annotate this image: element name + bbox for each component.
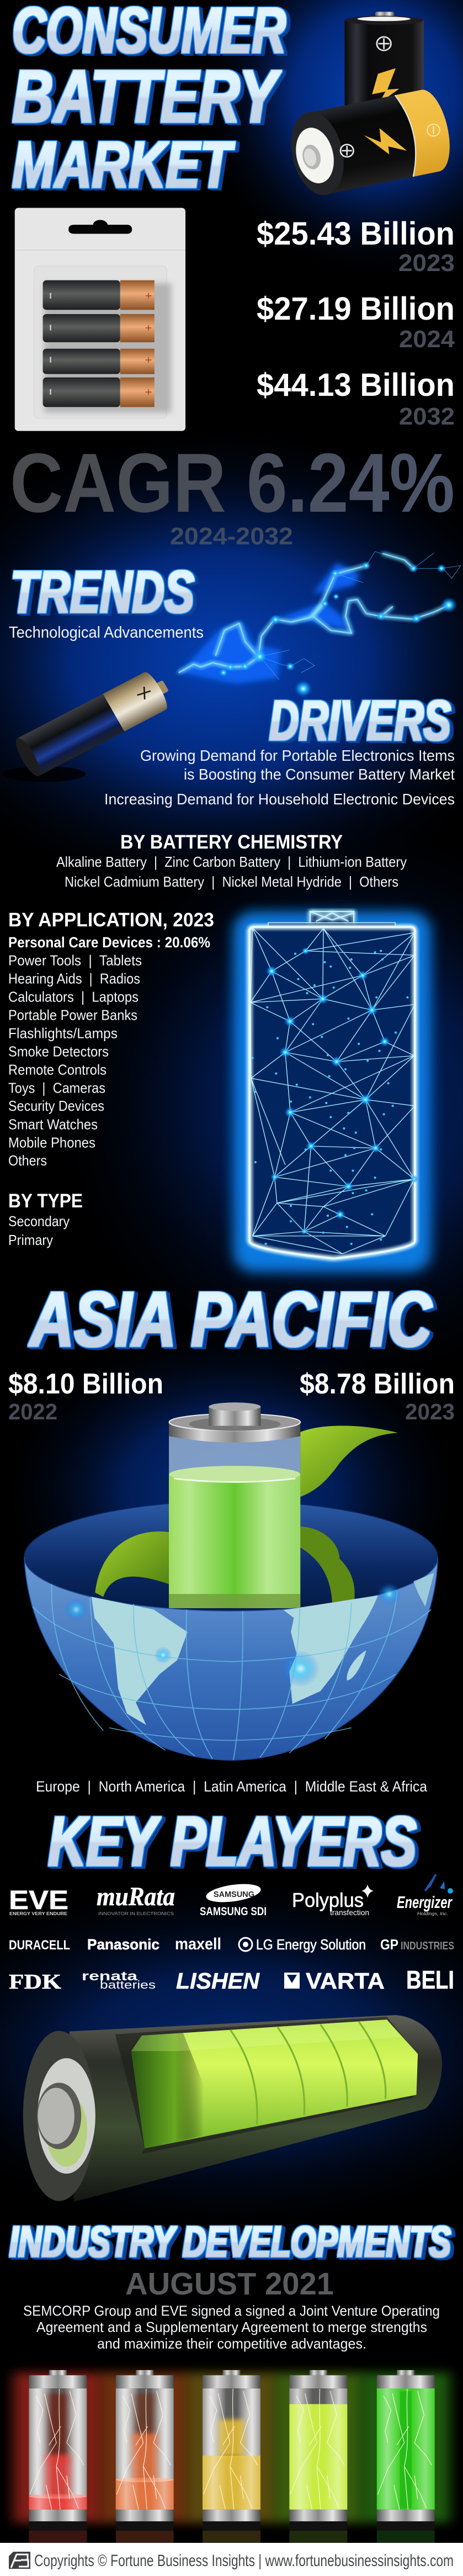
market value stats: 2024 [399, 326, 455, 353]
logo: Samsung SDI: SAMSUNG [214, 1890, 254, 1899]
logo: Polyplus: Polyplus [292, 1889, 364, 1911]
icon: globe bowl with battery and leaves [24, 1402, 438, 1760]
icon: blister pack of AA batteries [15, 208, 185, 431]
logo: Renata [82, 1969, 156, 1991]
logo: Energizer: Holdings, Inc. [417, 1911, 448, 1916]
icon: Fortune Business Insights logo [9, 2552, 30, 2569]
market value stats: $44.13 Billion [257, 367, 455, 403]
by application: Calculators | Laptops [8, 988, 139, 1005]
battery: red [14, 2370, 102, 2543]
asia pacific stats: 2022 [8, 1399, 57, 1424]
development text: SEMCORP Group and EVE signed a signed a Joint Venture Operating [23, 2302, 440, 2319]
by type: Secondary [8, 1213, 70, 1229]
by application: Hearing Aids | Radios [8, 971, 140, 987]
development text: and maximize their competitive advantages. [97, 2335, 366, 2352]
logo: muRata: INNOVATOR IN ELECTRONICS [98, 1911, 174, 1916]
icon: lightning [179, 552, 461, 697]
battery: yellow [187, 2370, 276, 2543]
by application: Smoke Detectors [8, 1043, 109, 1059]
market value stats: 2032 [399, 403, 455, 430]
battery: green [361, 2370, 450, 2543]
logo: Polyplus: transfection [330, 1908, 369, 1917]
by application: Personal Care Devices : 20.06% [8, 934, 210, 951]
by application: Portable Power Banks [8, 1006, 137, 1023]
by application: BY APPLICATION, 2023 [8, 909, 214, 931]
by application: Mobile Phones [8, 1135, 95, 1151]
logo: Lishen: LISHEN [176, 1968, 260, 1994]
logo: FDK: FDK [9, 1970, 62, 1994]
logo: GP Industries: GP [380, 1936, 398, 1953]
development text [23, 2266, 440, 2352]
icon: AA battery [3, 667, 177, 782]
logo: Renata: renata [82, 1969, 137, 1983]
logo: muRata: muRata [97, 1882, 175, 1911]
logo: EVE: EVE [9, 1886, 68, 1915]
company logos [9, 1874, 454, 1994]
by battery chemistry: Alkaline Battery | Zinc Carbon Battery | Lithium-ion Battery [56, 854, 407, 870]
logo: Energizer [397, 1874, 453, 1916]
by application: Security Devices [8, 1098, 104, 1114]
logo: Beli: BELI [406, 1965, 454, 1994]
asia pacific stats: 2023 [405, 1399, 455, 1424]
logo: Duracell: DURACELL [9, 1938, 70, 1953]
drivers heading and text: Growing Demand for Portable Electronics Items [140, 747, 455, 764]
asia pacific stats [8, 1368, 455, 1424]
market value stats [257, 216, 455, 430]
development text: Agreement and a Supplementary Agreement to merge strengths [36, 2319, 427, 2335]
logo: LG Energy Solution: LG Energy Solution [256, 1936, 366, 1953]
by application: Others [8, 1152, 47, 1169]
by battery chemistry: BY BATTERY CHEMISTRY [120, 831, 343, 853]
continents [92, 1573, 434, 1725]
regions: Europe | North America | Latin America | Middle East & Africa [36, 1778, 428, 1795]
drivers heading and text: is Boosting the Consumer Battery Market [184, 766, 455, 783]
by application: Power Tools | Tablets [8, 952, 142, 968]
green battery [169, 1402, 300, 1608]
logo: EVE: ENERGY VERY ENDURE [9, 1911, 68, 1916]
battery: orange [100, 2370, 189, 2543]
logo: Panasonic: Panasonic [87, 1936, 159, 1953]
drivers heading and text: Increasing Demand for Household Electronic Devices [104, 791, 455, 808]
logo: Renata: batteries [100, 1979, 156, 1991]
logo: Samsung SDI: SAMSUNG SDI [200, 1905, 267, 1918]
bowl interior [24, 1501, 438, 1614]
market value stats: 2023 [398, 250, 455, 277]
drivers heading and text [104, 689, 455, 808]
icon: large green battery [23, 2015, 442, 2202]
trends heading and text: Technological Advancements [9, 624, 204, 642]
bowl front [24, 1557, 438, 1760]
by type: Primary [8, 1232, 53, 1248]
logo: Maxell: maxell [175, 1935, 221, 1953]
logo: Varta: VARTA [306, 1968, 385, 1994]
title: BATTERY [12, 55, 281, 138]
by battery chemistry: Nickel Cadmium Battery | Nickel Metal Hydride | Others [65, 873, 398, 890]
footer [0, 2543, 463, 2576]
by application: Flashlights/Lamps [8, 1025, 118, 1042]
title [12, 0, 286, 202]
leaves [95, 1425, 398, 1603]
by battery chemistry [56, 831, 407, 890]
logo: Samsung SDI [200, 1881, 267, 1918]
icon: glowing network battery [233, 911, 431, 1272]
grid lines [33, 1584, 431, 1760]
market value stats: $27.19 Billion [257, 291, 455, 327]
icons: five charge level batteries [14, 2370, 450, 2543]
CAGR: 2024-2032 [170, 523, 293, 550]
light spots [65, 1583, 401, 1687]
battery: lime [274, 2370, 363, 2543]
logo: Polyplus [292, 1884, 374, 1917]
trends heading and text: TRENDS [10, 558, 194, 625]
logo: GP Industries [380, 1936, 454, 1953]
development text: AUGUST 2021 [125, 2266, 334, 2302]
by type [8, 1190, 83, 1248]
by application: Smart Watches [8, 1116, 98, 1132]
icon: two black and yellow batteries [284, 12, 456, 200]
by application [8, 909, 214, 1169]
title: MARKET [12, 128, 235, 202]
by application: Toys | Cameras [8, 1080, 105, 1096]
by type: BY TYPE [8, 1190, 83, 1212]
market value stats: $25.43 Billion [257, 216, 455, 252]
by application: Remote Controls [8, 1061, 107, 1078]
asia pacific stats: $8.10 Billion [8, 1368, 163, 1400]
asia pacific stats: $8.78 Billion [300, 1368, 455, 1400]
trends heading and text [9, 558, 204, 642]
